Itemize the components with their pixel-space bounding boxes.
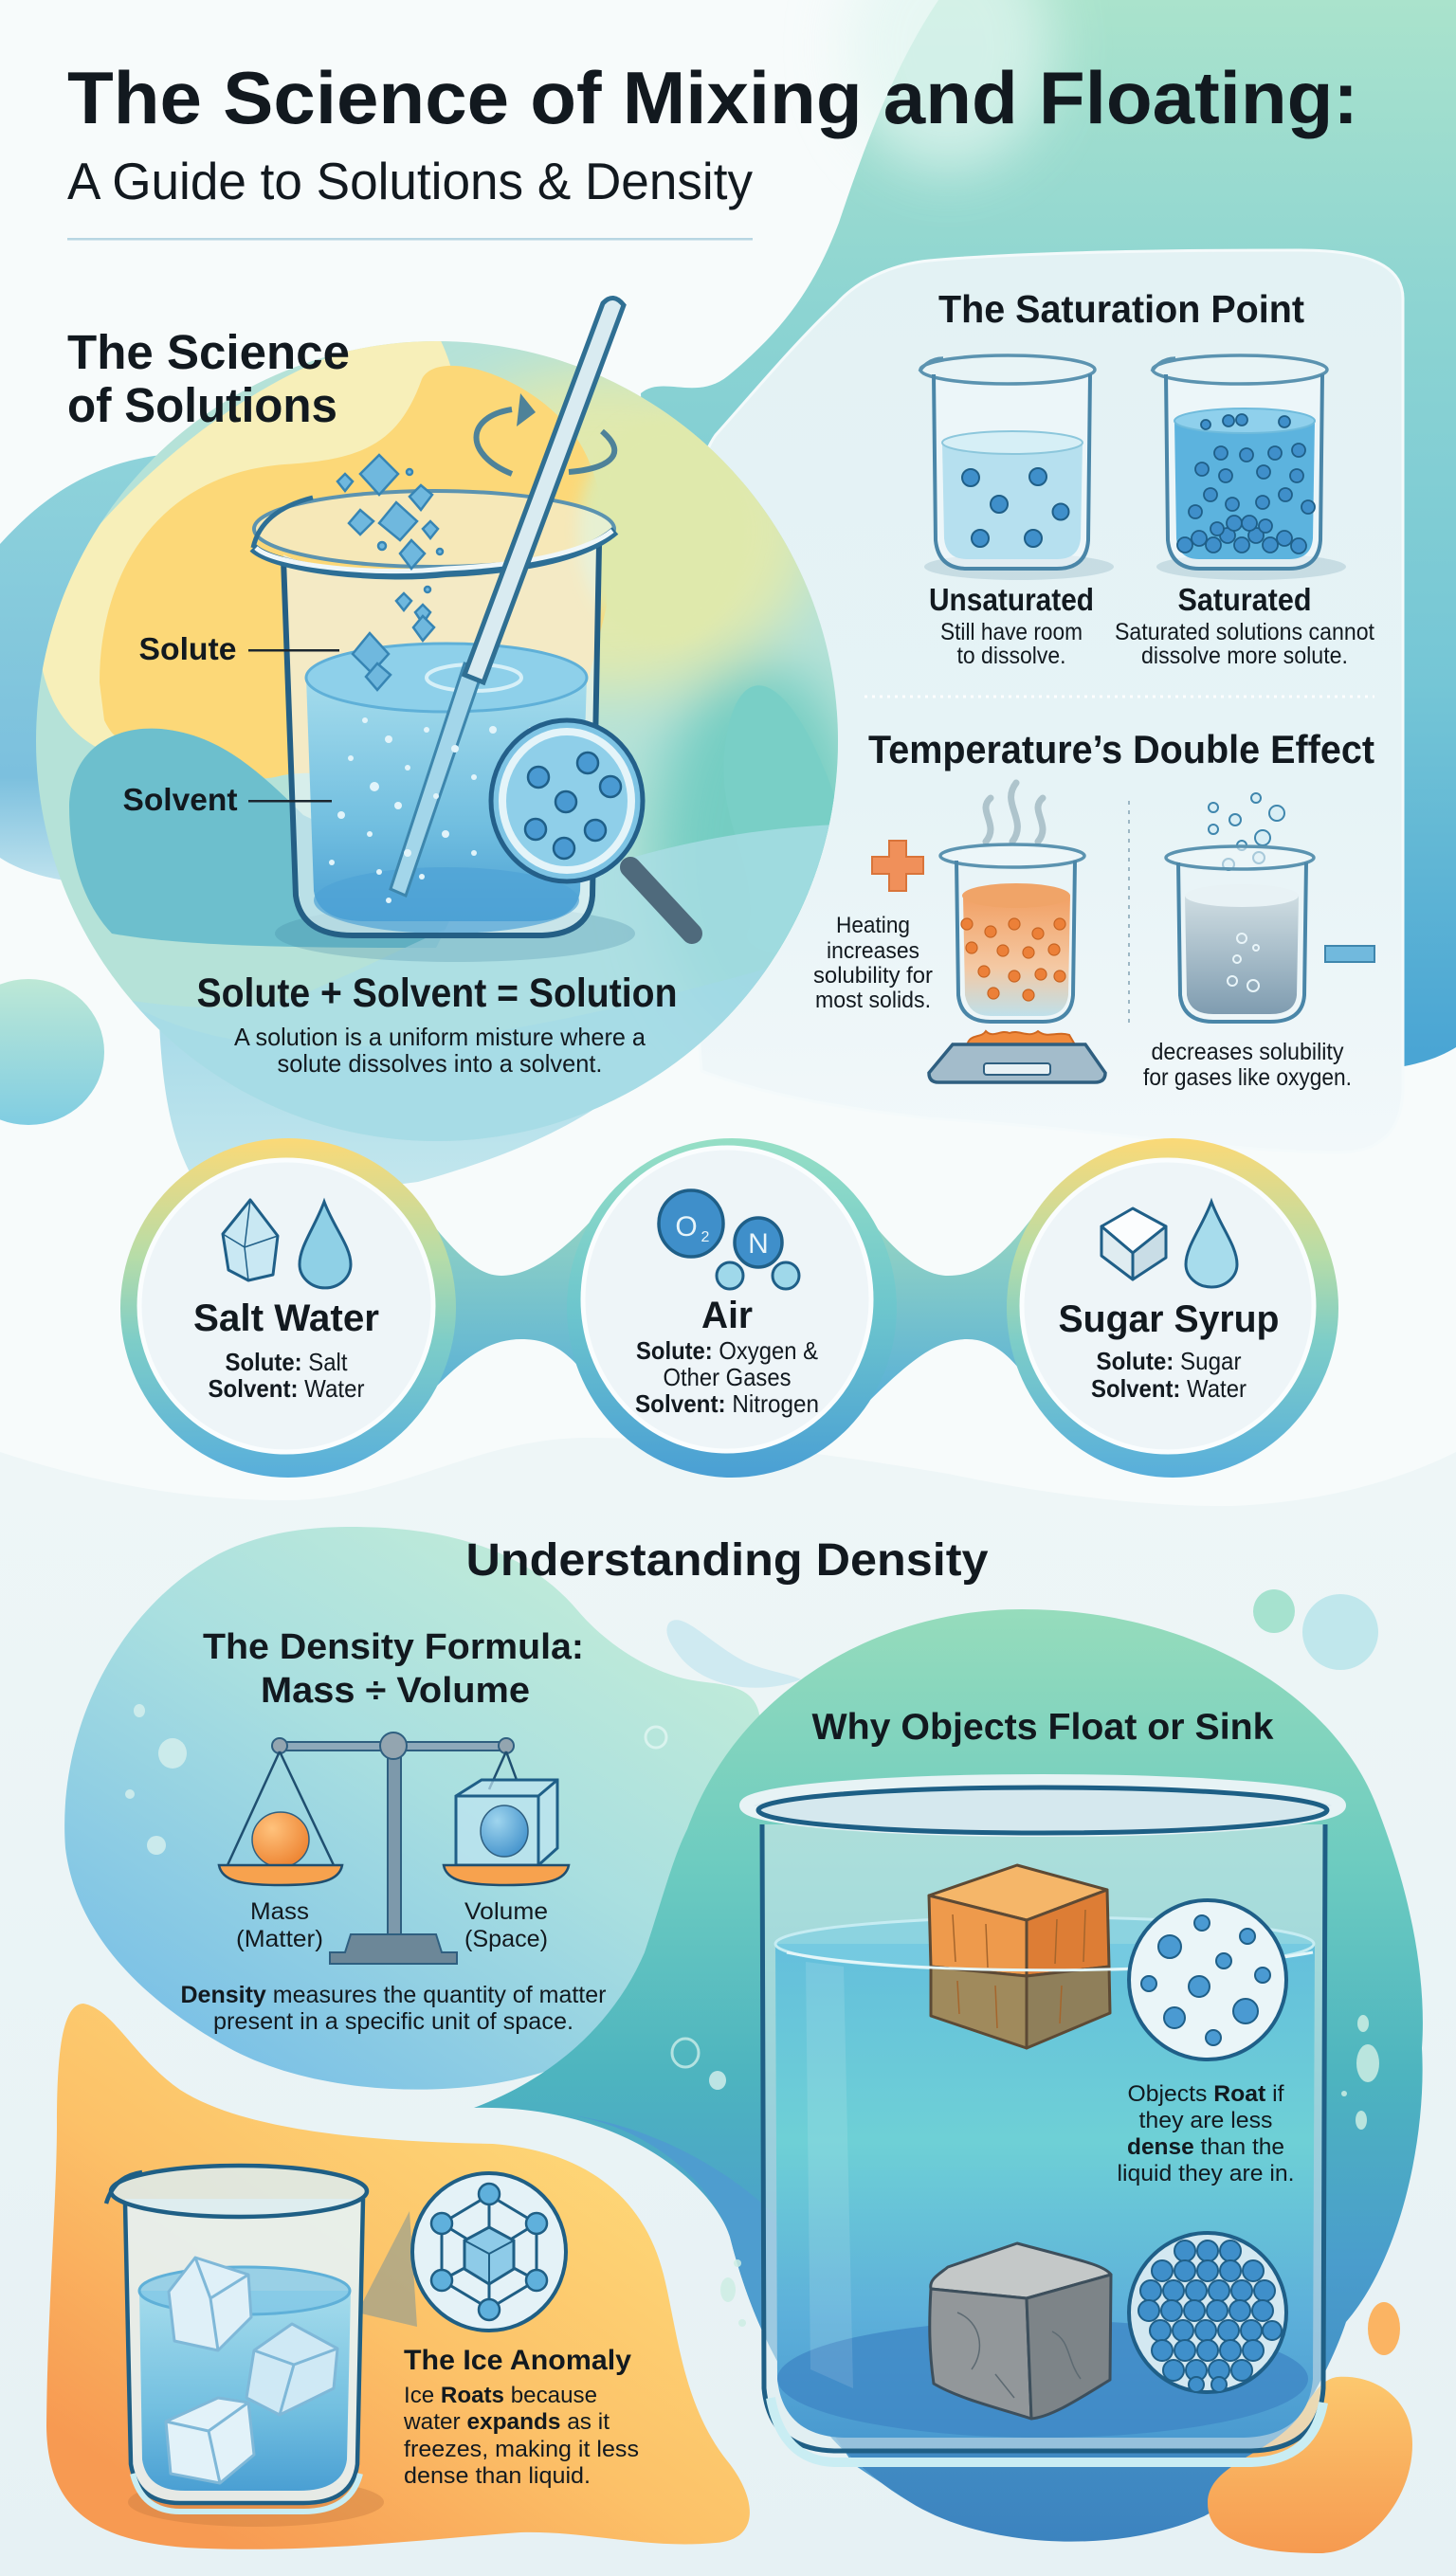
card: salt water: Solute: Salt bbox=[226, 1348, 348, 1376]
label: saturated: dissolve more solute. bbox=[1141, 643, 1348, 669]
labels: mass and volume: (Matter) bbox=[236, 1926, 323, 1952]
subtitle: A Guide to Solutions & Density bbox=[67, 152, 753, 210]
steam bbox=[986, 783, 1043, 842]
scale stand bbox=[388, 1749, 401, 1938]
heated beaker on burner bbox=[929, 783, 1105, 1082]
card: air: Solute: Oxygen & bbox=[636, 1336, 818, 1365]
heading: the density formula: Mass ÷ Volume bbox=[261, 1671, 530, 1711]
float explanation: liquid they are in. bbox=[1117, 2161, 1295, 2186]
diagram: high density particles bbox=[1129, 2233, 1286, 2392]
card: salt water: Salt Water bbox=[193, 1297, 379, 1339]
ice anomaly text: freezes, making it less bbox=[404, 2437, 639, 2462]
panel backdrop: why objects float or sink bbox=[474, 1609, 1423, 2542]
float explanation bbox=[1117, 2081, 1295, 2186]
card: sugar syrup: Solvent: Water bbox=[1091, 1374, 1247, 1403]
float explanation: Objects Roat if bbox=[1128, 2081, 1284, 2107]
wood cube bbox=[929, 1865, 1110, 2048]
ice anomaly text: The Ice Anomaly bbox=[404, 2345, 631, 2376]
water bbox=[306, 678, 587, 921]
equation heading: Solute + Solvent = Solution bbox=[197, 971, 677, 1016]
ring connectors bbox=[412, 1185, 1047, 1412]
pale yellow green right bbox=[573, 419, 737, 622]
icon: plus bbox=[872, 841, 923, 891]
ice anomaly text: Ice Roats because bbox=[404, 2383, 597, 2408]
float explanation: dense than the bbox=[1127, 2134, 1284, 2160]
cooling beaker with gas bubbles bbox=[1166, 793, 1314, 1022]
labels: mass and volume: Mass bbox=[250, 1898, 309, 1925]
beaker: unsaturated bbox=[919, 355, 1114, 580]
ice anomaly text: dense than liquid. bbox=[404, 2463, 591, 2489]
glass outline bbox=[762, 1824, 1325, 2451]
icon: nitrogen molecule bbox=[717, 1218, 799, 1289]
label: saturated bbox=[1115, 582, 1374, 669]
hot plate bbox=[929, 1044, 1105, 1082]
card: sugar syrup bbox=[1007, 1138, 1338, 1478]
cooling text: for gases like oxygen. bbox=[1143, 1064, 1352, 1091]
icon: salt crystal bbox=[223, 1200, 278, 1280]
glass outline bbox=[125, 2199, 363, 2503]
heading: the density formula bbox=[203, 1627, 584, 1711]
glass body bbox=[283, 540, 599, 935]
diagram: low density particles bbox=[1129, 1900, 1286, 2059]
heating text: most solids. bbox=[815, 988, 931, 1013]
panel backdrop: density formula bbox=[64, 1527, 761, 2090]
card: air: Other Gases bbox=[664, 1363, 791, 1391]
stir rod in water bbox=[391, 663, 483, 896]
rock cube bbox=[930, 2243, 1111, 2419]
small left circle bbox=[0, 979, 104, 1125]
panel backdrop: ice anomaly bbox=[46, 2004, 750, 2549]
density description: present in a specific unit of space. bbox=[213, 2008, 573, 2035]
label: unsaturated: Unsaturated bbox=[929, 582, 1094, 617]
label: unsaturated bbox=[929, 582, 1094, 669]
heating text bbox=[813, 913, 933, 1013]
large beaker illustration bbox=[745, 1780, 1340, 2462]
top right gradient blob bbox=[641, 0, 1456, 1071]
bottom blue wash bbox=[133, 825, 828, 1109]
density description bbox=[180, 1982, 607, 2035]
stirring rod bbox=[464, 298, 624, 682]
card: salt water bbox=[120, 1138, 456, 1478]
heading: the density formula: The Density Formula: bbox=[203, 1627, 584, 1667]
magnifying glass bbox=[491, 720, 692, 934]
panel backdrop: saturation and temperature bbox=[664, 250, 1403, 1152]
heading: the science of solutions: of Solutions bbox=[67, 378, 337, 432]
main beaker illustration bbox=[253, 298, 692, 962]
heating text: increases bbox=[827, 938, 919, 964]
label: saturated: Saturated solutions cannot bbox=[1115, 619, 1374, 645]
icon: water drop bbox=[300, 1202, 351, 1288]
cooling text: decreases solubility bbox=[1151, 1039, 1344, 1065]
heading: temperature's double effect: Temperature’s Double Effect bbox=[868, 727, 1374, 771]
equation description bbox=[234, 1023, 646, 1078]
label: solute: Solute bbox=[138, 631, 237, 666]
label: unsaturated: to dissolve. bbox=[957, 643, 1065, 669]
equation description: A solution is a uniform misture where a bbox=[234, 1023, 646, 1051]
blue sweep left of large beaker bbox=[559, 2113, 910, 2502]
lattice pointer wedge bbox=[357, 2211, 417, 2327]
card: air: Air bbox=[701, 1295, 753, 1336]
equation description: solute dissolves into a solvent. bbox=[277, 1049, 603, 1078]
label: saturated: Saturated bbox=[1177, 582, 1312, 617]
lower section background wave bbox=[0, 1438, 1456, 2576]
tail below big circle bbox=[158, 995, 654, 1208]
card: air: Solvent: Nitrogen bbox=[635, 1389, 819, 1418]
heading: the science of solutions: The Science bbox=[67, 325, 350, 379]
heading: the science of solutions bbox=[67, 325, 350, 432]
mass pan bbox=[219, 1751, 342, 1885]
diagram: ice lattice bbox=[412, 2173, 566, 2331]
card: air bbox=[567, 1138, 897, 1478]
yellow blob bbox=[100, 366, 607, 784]
falling crystals bbox=[337, 455, 443, 690]
title: The Science of Mixing and Floating: bbox=[67, 56, 1358, 139]
cooling text bbox=[1143, 1039, 1352, 1091]
heating text: solubility for bbox=[813, 963, 933, 989]
card: salt water: Solvent: Water bbox=[209, 1374, 365, 1403]
icon: syrup drop bbox=[1186, 1202, 1237, 1287]
burner flame bbox=[967, 1031, 1076, 1046]
labels: mass and volume: Volume bbox=[464, 1898, 548, 1925]
rim and glass outline bbox=[254, 491, 614, 567]
big circle backdrop bbox=[36, 332, 863, 1141]
volume pan with cube bbox=[444, 1751, 569, 1885]
heating text: Heating bbox=[836, 913, 910, 938]
float explanation: they are less bbox=[1139, 2108, 1272, 2133]
small orange dot bbox=[1368, 2302, 1400, 2355]
icon: oxygen molecule bbox=[659, 1190, 723, 1257]
balance scale icon bbox=[219, 1732, 569, 1964]
dissolved particles bbox=[329, 717, 534, 903]
teal right bbox=[734, 685, 834, 953]
glass back bbox=[762, 1824, 1325, 2451]
left blue blob bbox=[0, 455, 161, 884]
decorative density bubbles bbox=[125, 1704, 726, 2090]
heading: why objects float or sink: Why Objects Float or Sink bbox=[811, 1707, 1274, 1748]
labels: mass and volume: (Space) bbox=[464, 1926, 548, 1952]
stir rotation arrow bbox=[476, 393, 614, 474]
density description: Density measures the quantity of matter bbox=[180, 1982, 607, 2008]
ice anomaly text: water expands as it bbox=[403, 2409, 610, 2435]
icon: nitrogen molecule: N bbox=[748, 1228, 769, 1260]
heading: saturation point: The Saturation Point bbox=[938, 287, 1304, 331]
heading: understanding density: Understanding Density bbox=[466, 1535, 989, 1586]
icon: oxygen molecule: 2 bbox=[701, 1229, 710, 1245]
ice cubes bbox=[166, 2258, 337, 2483]
icon: oxygen molecule: O bbox=[675, 1211, 698, 1243]
teal lower left blob bbox=[69, 728, 441, 948]
big beaker water bbox=[775, 1944, 1315, 2438]
decorative bubbles upper right bbox=[666, 1589, 1378, 1688]
card: sugar syrup: Solute: Sugar bbox=[1096, 1347, 1242, 1375]
ice anomaly text bbox=[403, 2345, 639, 2489]
decorative right bubbles bbox=[720, 2015, 1379, 2327]
rim bbox=[745, 1780, 1340, 1831]
beaker: saturated bbox=[1152, 355, 1346, 580]
orange blob lower right bbox=[1208, 2377, 1412, 2553]
labels: mass and volume bbox=[236, 1898, 548, 1952]
card: sugar syrup: Sugar Syrup bbox=[1058, 1298, 1280, 1340]
label: solvent: Solvent bbox=[123, 782, 237, 817]
icon: minus bbox=[1325, 946, 1374, 962]
ice beaker illustration bbox=[106, 2166, 417, 2527]
pale yellow top bbox=[42, 341, 451, 747]
scale beam bbox=[279, 1742, 506, 1751]
label: unsaturated: Still have room bbox=[940, 619, 1083, 645]
icon: sugar cube bbox=[1101, 1208, 1166, 1279]
